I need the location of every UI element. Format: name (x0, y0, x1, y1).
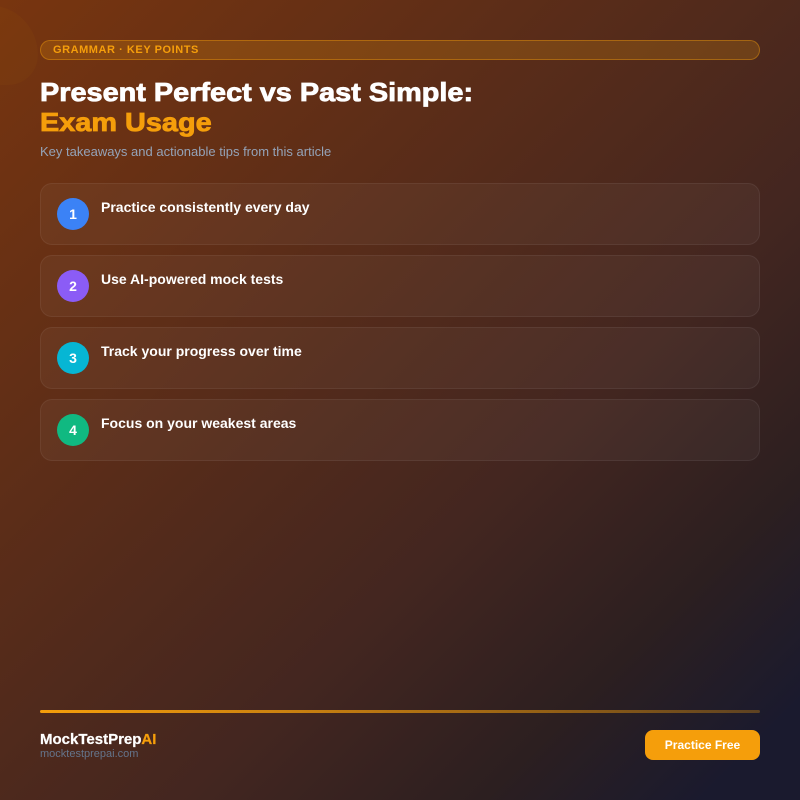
number badge 2: 2 (69, 278, 77, 294)
category badge: GRAMMAR · KEY POINTS (53, 44, 199, 56)
call to action button (645, 730, 760, 760)
number badge 4 (57, 414, 89, 446)
number badge 1 (57, 198, 89, 230)
category badge (40, 40, 760, 60)
key point 3 text: Track your progress over time (101, 342, 302, 358)
key point 2 text: Use AI-powered mock tests (101, 270, 283, 286)
key point 1 text: Practice consistently every day (101, 198, 310, 214)
title (40, 77, 473, 137)
number badge 2 (57, 270, 89, 302)
call to action button: Practice Free (665, 738, 740, 752)
key point 4 text: Focus on your weakest areas (101, 414, 296, 430)
brand name: MockTestPrepAI (40, 731, 156, 748)
footer accent line (40, 710, 760, 713)
panel: key point 4 (40, 399, 760, 461)
title: Present Perfect vs Past Simple: (40, 77, 473, 107)
number badge 3 (57, 342, 89, 374)
number badge 3: 3 (69, 350, 77, 366)
brand website: mocktestprepai.com (40, 748, 138, 760)
panel: key point 3 (40, 327, 760, 389)
decorative corner glow (0, 5, 38, 85)
subtitle: Key takeaways and actionable tips from this article (40, 144, 331, 159)
number badge 1: 1 (69, 206, 77, 222)
title: Exam Usage (40, 107, 212, 137)
panel: key point 1 (40, 183, 760, 245)
number badge 4: 4 (69, 422, 77, 438)
panel: key point 2 (40, 255, 760, 317)
